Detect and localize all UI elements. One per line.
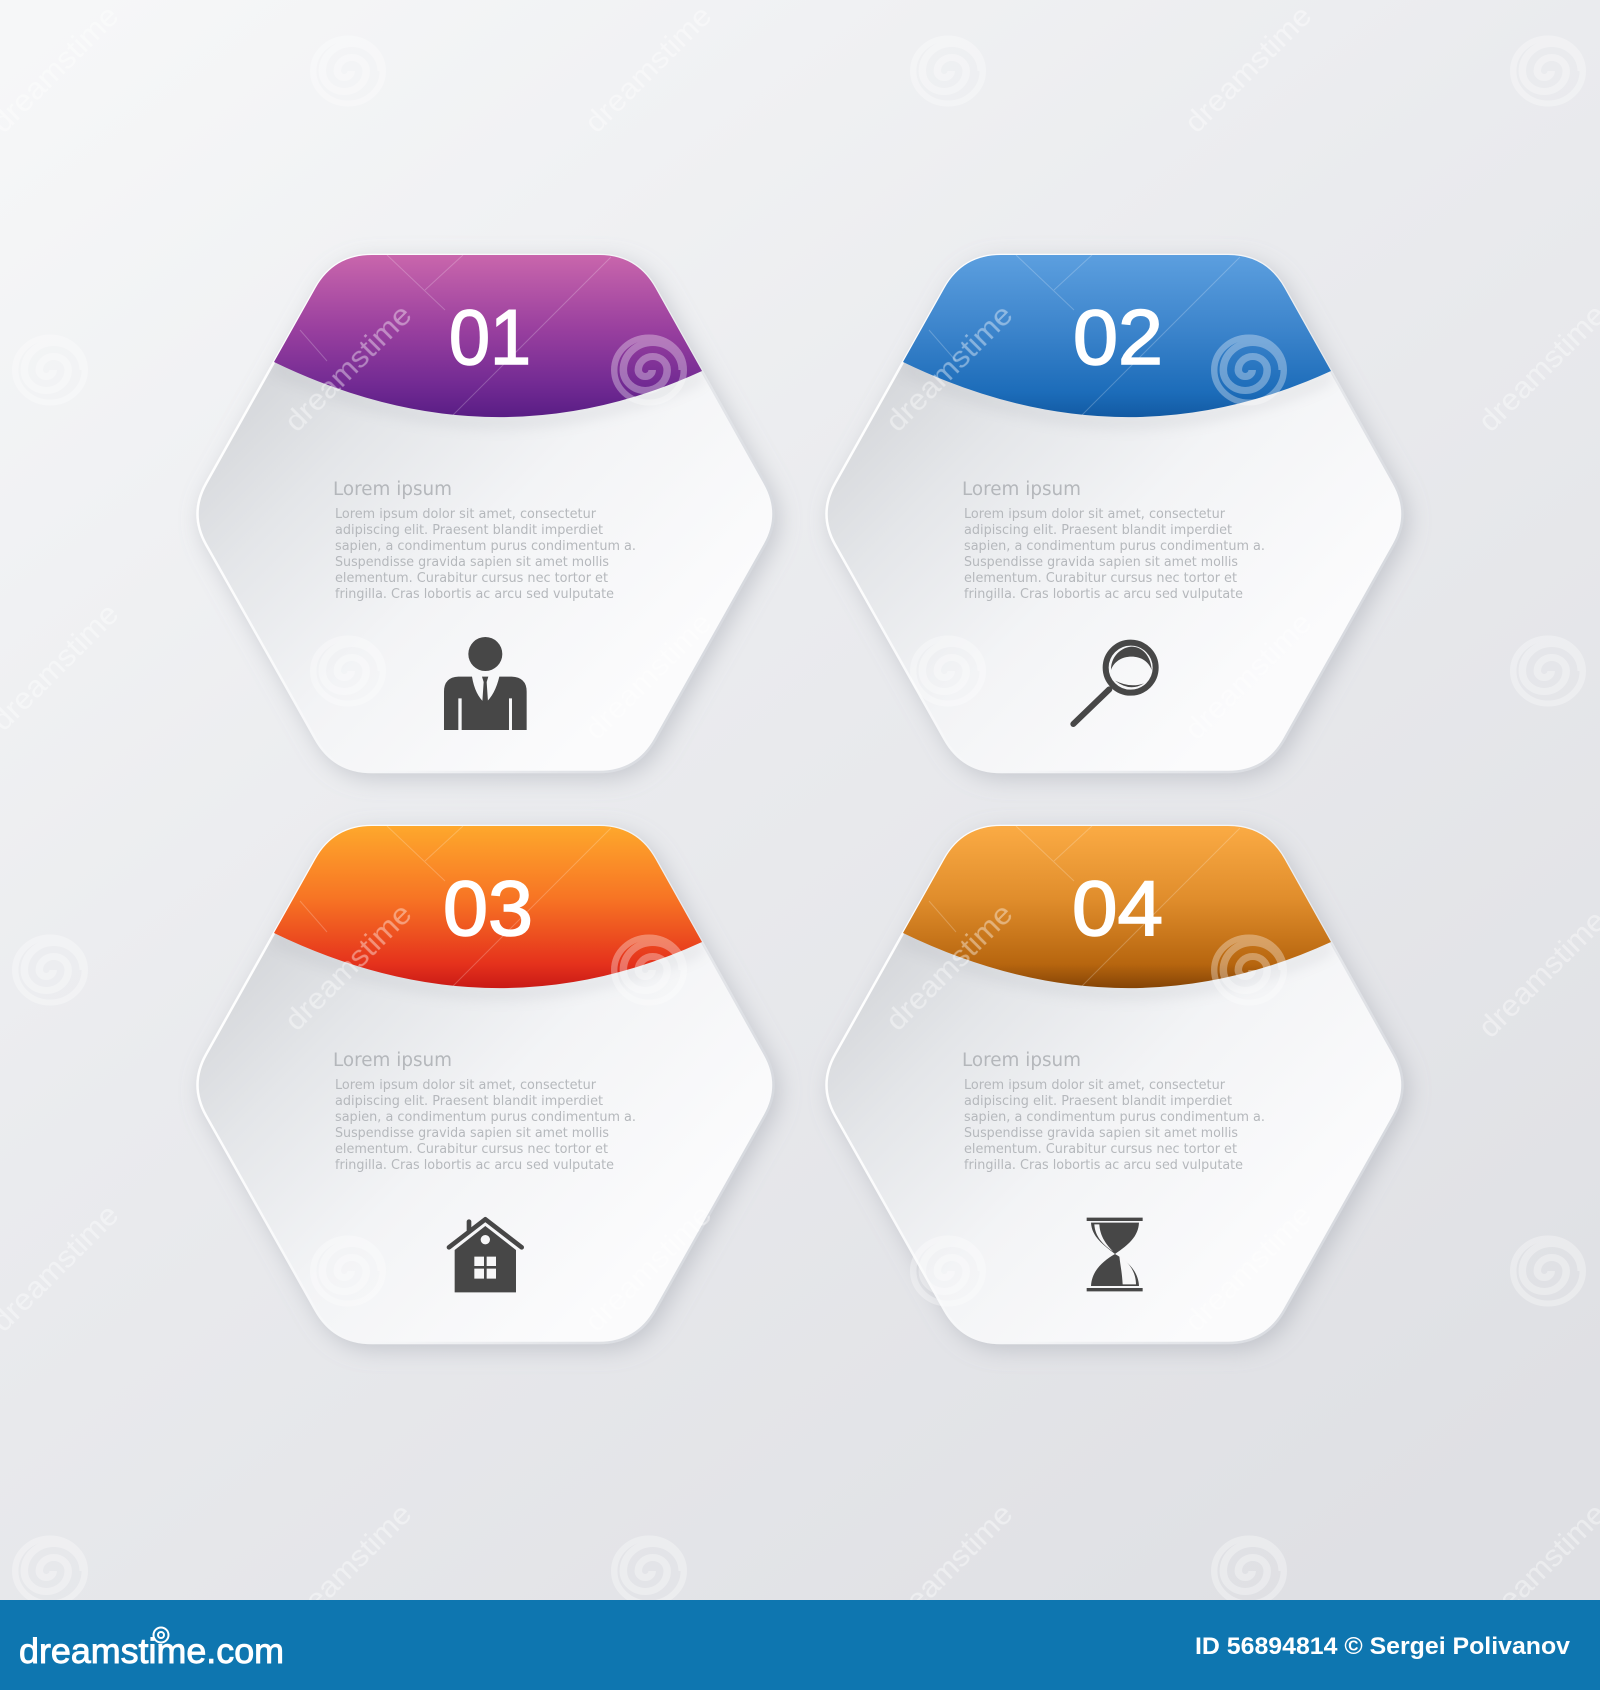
body text: Lorem ipsum dolor sit amet, consectetur: [335, 506, 596, 522]
body text: Lorem ipsum dolor sit amet, consectetur: [964, 506, 1225, 522]
hexagon body: [198, 255, 774, 772]
band shadow: [944, 375, 1327, 428]
body text: Lorem ipsum dolor sit amet, consectetur: [335, 1077, 596, 1093]
body text: Suspendisse gravida sapien sit amet mollis: [964, 1125, 1238, 1141]
number 03: 03: [443, 864, 533, 952]
body text: fringilla. Cras lobortis ac arcu sed vulputate: [335, 586, 614, 602]
footer bar: [0, 1600, 1600, 1690]
band shadow: [316, 946, 698, 998]
footer logo text: dreamstime.com: [19, 1632, 284, 1671]
body text: elementum. Curabitur cursus nec tortor et: [335, 1141, 608, 1157]
amber header band: [903, 826, 1331, 988]
body text: Lorem ipsum dolor sit amet, consectetur: [964, 1077, 1225, 1093]
blue header band: [903, 255, 1331, 417]
icon: businessman: [444, 637, 527, 730]
panel: card 02: [826, 255, 1402, 772]
watermark: rotated wordmarks: dreamstime: [578, 1198, 718, 1338]
heading: Lorem ipsum: [962, 479, 1081, 500]
body text: adipiscing elit. Praesent blandit imperdiet: [964, 522, 1232, 538]
body text: [335, 506, 636, 602]
number 02: 02: [1073, 293, 1163, 381]
heading: Lorem ipsum: [962, 1050, 1081, 1071]
body text: sapien, a condimentum purus condimentum a.: [964, 538, 1265, 554]
credit line: ID 56894814 © Sergei Polivanov: [1195, 1633, 1571, 1660]
body text: Suspendisse gravida sapien sit amet mollis: [335, 1125, 609, 1141]
body text: sapien, a condimentum purus condimentum a.: [964, 1109, 1265, 1125]
body text: elementum. Curabitur cursus nec tortor et: [964, 1141, 1237, 1157]
heading: Lorem ipsum: [333, 1050, 452, 1071]
purple header band: [274, 255, 702, 417]
watermark: rotated wordmarks: dreamstime: [278, 298, 418, 438]
hexagon body: [826, 826, 1402, 1343]
body text: elementum. Curabitur cursus nec tortor et: [335, 570, 608, 586]
panel: card 01: [198, 255, 774, 772]
heading: Lorem ipsum: [333, 479, 452, 500]
body text: adipiscing elit. Praesent blandit imperdiet: [335, 1093, 603, 1109]
body text: sapien, a condimentum purus condimentum a.: [335, 538, 636, 554]
body text: fringilla. Cras lobortis ac arcu sed vulputate: [335, 1157, 614, 1173]
watermark: rotated wordmarks: dreamstime: [879, 298, 1019, 438]
watermark: rotated wordmarks: dreamstime: [278, 1497, 418, 1637]
body text: fringilla. Cras lobortis ac arcu sed vulputate: [964, 1157, 1243, 1173]
watermark: rotated wordmarks: dreamstime: [578, 606, 718, 746]
watermark: rotated wordmarks: dreamstime: [578, 0, 718, 139]
watermark: rotated wordmarks: dreamstime: [1178, 0, 1318, 139]
body text: fringilla. Cras lobortis ac arcu sed vulputate: [964, 586, 1243, 602]
icon: magnifying glass: [1073, 643, 1156, 724]
band shadow: [943, 946, 1327, 998]
number 04: 04: [1072, 864, 1163, 952]
footer logo spiral: [154, 1628, 168, 1642]
number 01: 01: [449, 293, 531, 381]
body text: Suspendisse gravida sapien sit amet mollis: [335, 554, 609, 570]
body text: [964, 506, 1265, 602]
watermark: rotated wordmarks: dreamstime: [1178, 606, 1318, 746]
orange-red header band: [274, 826, 702, 988]
hexagon body: [198, 826, 774, 1343]
body text: [964, 1077, 1265, 1173]
body text: Suspendisse gravida sapien sit amet mollis: [964, 554, 1238, 570]
panel: card 03: [198, 826, 774, 1343]
watermark: rotated wordmarks: dreamstime: [879, 1497, 1019, 1637]
panel: card 04: [826, 826, 1402, 1343]
watermark: rotated wordmarks: dreamstime: [879, 897, 1019, 1037]
icon: hourglass: [1087, 1218, 1143, 1291]
hexagon body: [826, 255, 1402, 772]
watermark: rotated wordmarks: dreamstime: [278, 897, 418, 1037]
icon: house: [449, 1219, 522, 1292]
band shadow: [316, 375, 698, 428]
body text: [335, 1077, 636, 1173]
watermark: rotated wordmarks: dreamstime: [1178, 1198, 1318, 1338]
body text: adipiscing elit. Praesent blandit imperdiet: [335, 522, 603, 538]
body text: sapien, a condimentum purus condimentum a.: [335, 1109, 636, 1125]
body text: adipiscing elit. Praesent blandit imperdiet: [964, 1093, 1232, 1109]
body text: elementum. Curabitur cursus nec tortor et: [964, 570, 1237, 586]
